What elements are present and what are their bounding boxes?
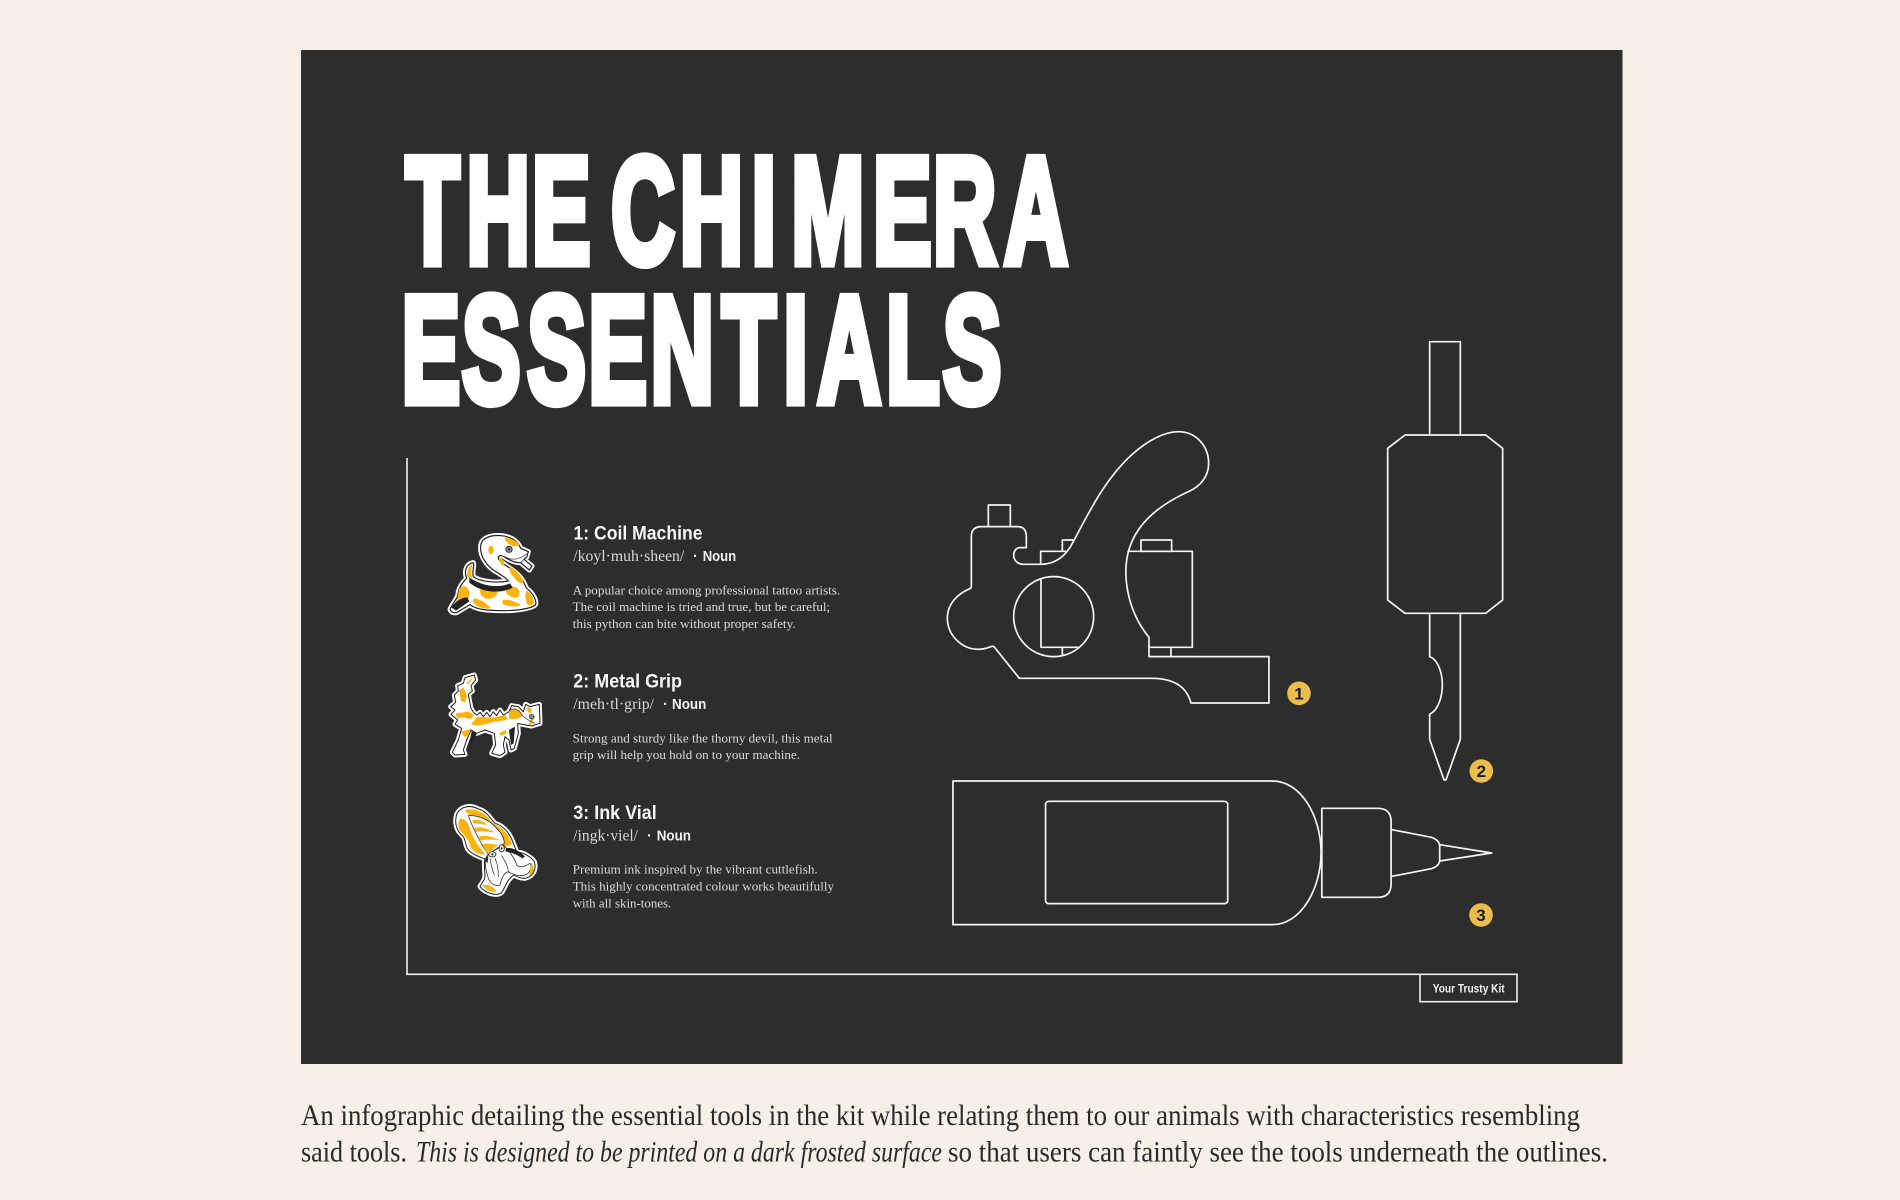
badge 3	[1469, 903, 1493, 927]
badge 1: 1	[1294, 684, 1304, 703]
pronunciation: /meh·tl·grip/	[573, 696, 655, 713]
description	[573, 730, 833, 762]
caption: This is designed to be printed on a dark frosted surface	[416, 1136, 942, 1169]
heading: 3: Ink Vial	[573, 802, 657, 824]
description: This highly concentrated colour works beautifully	[573, 879, 834, 894]
outline: ink vial bottle	[953, 781, 1492, 925]
pronunciation: /ingk·viel/	[573, 828, 639, 845]
description	[573, 862, 834, 910]
description: this python can bite without proper safety.	[573, 616, 796, 631]
entry 3: ink vial	[456, 802, 834, 910]
badge 1	[1287, 682, 1311, 705]
caption	[301, 1099, 1608, 1169]
outline: coil machine	[947, 432, 1269, 703]
icon: cuttlefish	[456, 807, 535, 894]
title: ESSENTIALS	[402, 266, 1001, 435]
pronunciation: /koyl·muh·sheen/	[573, 548, 685, 565]
description: grip will help you hold on to your machine.	[573, 747, 800, 762]
icon: python	[450, 536, 536, 613]
description: Premium ink inspired by the vibrant cuttlefish.	[573, 862, 818, 877]
description: Strong and sturdy like the thorny devil, this metal	[573, 730, 833, 745]
icon: thorny devil	[451, 675, 540, 756]
caption: so that users can faintly see the tools underneath the outlines.	[948, 1136, 1608, 1169]
description: The coil machine is tried and true, but be careful;	[573, 599, 830, 614]
description	[573, 582, 840, 631]
pronunciation	[573, 548, 736, 565]
title: THE CHIMERA	[406, 127, 1068, 296]
panel: dark background	[301, 50, 1622, 1064]
entry 1: coil machine	[450, 522, 840, 631]
pronunciation	[573, 828, 691, 845]
description: with all skin-tones.	[573, 895, 671, 910]
title	[402, 127, 1068, 435]
description: A popular choice among professional tattoo artists.	[573, 582, 840, 597]
pronunciation: Noun	[657, 829, 691, 845]
tag: Your Trusty Kit	[1420, 974, 1517, 1002]
pronunciation: Noun	[703, 549, 736, 565]
caption: An infographic detailing the essential tools in the kit while relating them to our animals with characteristics resembling	[301, 1099, 1580, 1132]
tag: Your Trusty Kit: Your Trusty Kit	[1433, 981, 1505, 995]
heading: 2: Metal Grip	[573, 670, 682, 692]
pronunciation: ·	[647, 829, 652, 845]
pronunciation	[573, 696, 706, 713]
frame: list and tools border	[407, 458, 1420, 974]
pronunciation: ·	[693, 549, 698, 565]
badge 2	[1470, 759, 1493, 783]
badge 3: 3	[1476, 906, 1486, 925]
outline: metal grip needle	[1388, 342, 1503, 780]
heading: 1: Coil Machine	[574, 522, 703, 544]
badge 2: 2	[1477, 762, 1486, 781]
pronunciation: ·	[663, 697, 668, 713]
pronunciation: Noun	[672, 697, 706, 713]
caption: said tools.	[301, 1136, 407, 1169]
entry 2: metal grip	[451, 670, 833, 762]
